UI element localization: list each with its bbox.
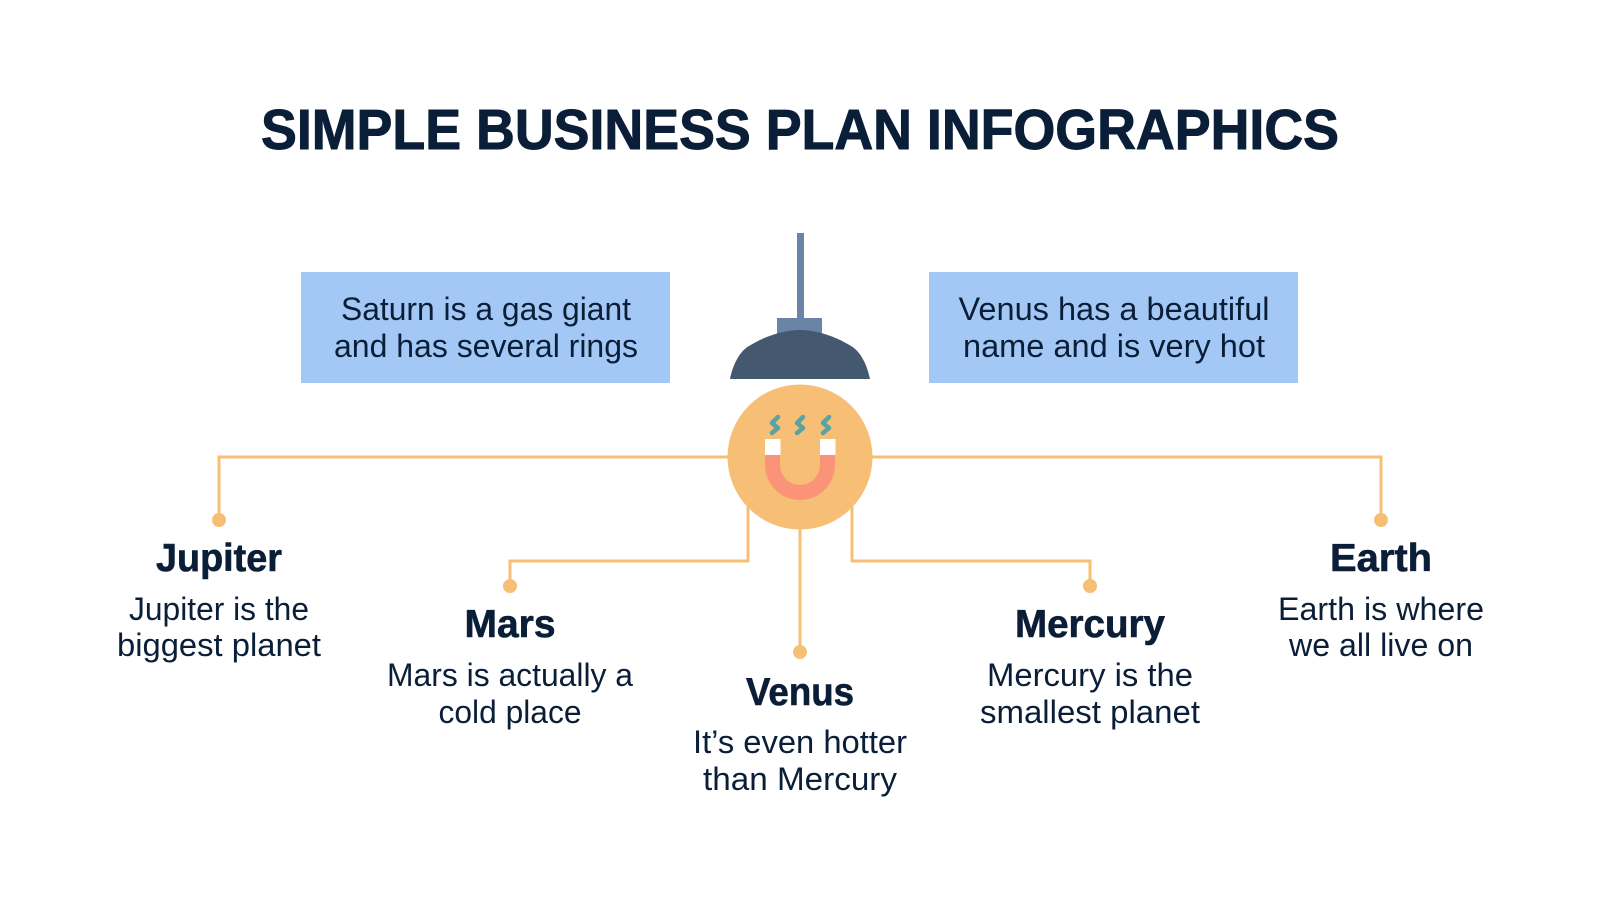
Mars (387, 603, 633, 730)
icon: hanging lamp (730, 233, 870, 379)
Earth: Earth (1330, 537, 1432, 580)
icon: magnet badge (728, 384, 872, 530)
Mars: Mars is actually a (387, 657, 633, 693)
Mercury: Mercury (1015, 603, 1165, 646)
Venus: Venus (746, 671, 854, 714)
Earth: we all live on (1288, 627, 1473, 663)
panel: Venus callout: Venus has a beautiful (958, 291, 1270, 327)
Jupiter: biggest planet (117, 627, 321, 663)
title: SIMPLE BUSINESS PLAN INFOGRAPHICS (261, 98, 1339, 162)
panel: Saturn callout: Saturn is a gas giant (341, 291, 631, 327)
Mars: Mars (464, 603, 556, 646)
Jupiter (117, 537, 321, 663)
Mercury (980, 603, 1200, 730)
Venus: It’s even hotter (693, 724, 907, 760)
Jupiter: Jupiter (156, 537, 282, 580)
Jupiter: Jupiter is the (129, 591, 309, 627)
panel: Saturn callout (301, 272, 670, 383)
Earth: Earth is where (1278, 591, 1484, 627)
panel: Venus callout (929, 272, 1298, 383)
panel: Venus callout: name and is very hot (963, 328, 1265, 364)
Mars: cold place (438, 694, 582, 730)
Venus (693, 671, 907, 797)
panel: Saturn callout: and has several rings (334, 328, 638, 364)
Venus: than Mercury (703, 761, 897, 797)
connector lines (212, 457, 1388, 659)
Mercury: smallest planet (980, 694, 1200, 730)
Earth (1278, 537, 1484, 663)
Mercury: Mercury is the (987, 657, 1193, 693)
